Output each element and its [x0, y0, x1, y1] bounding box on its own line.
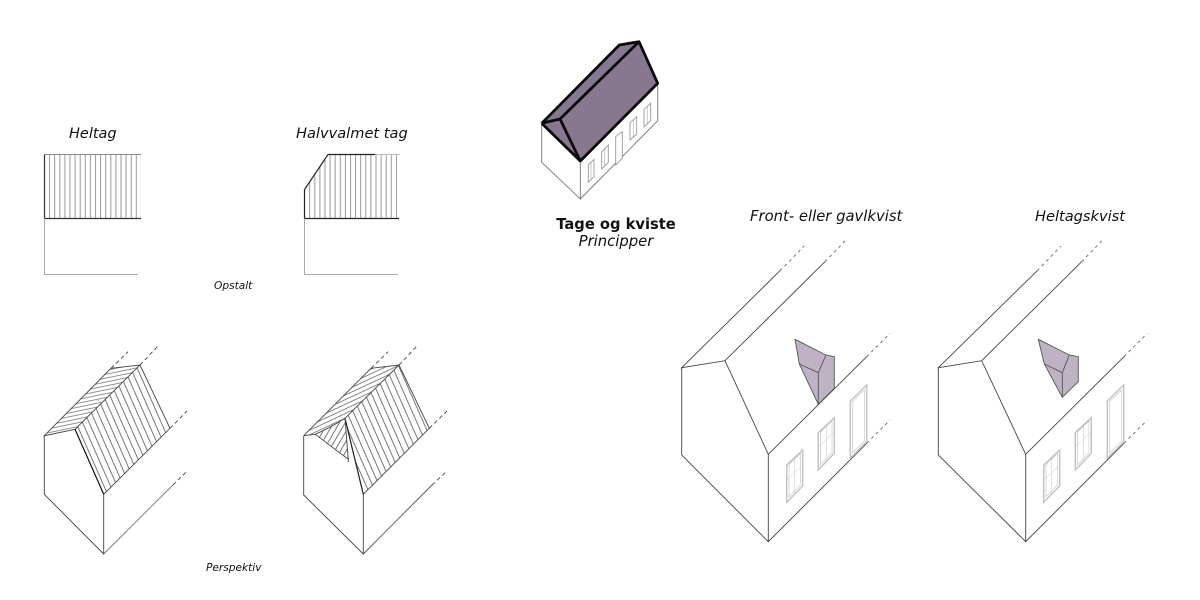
windows and door — [787, 385, 867, 502]
heading: Heltagskvist: Heltagskvist — [1035, 208, 1126, 225]
heading: Front- eller gavlkvist: Front- eller gavlkvist — [750, 208, 904, 225]
roof — [542, 42, 658, 161]
subtitle: Principper: Principper — [579, 233, 654, 250]
elevation drawing: Heltag — [44, 154, 141, 274]
perspective drawing: Heltag — [44, 346, 187, 554]
icon: front dormer — [795, 339, 834, 404]
windows and door — [588, 103, 651, 182]
walls — [542, 83, 658, 199]
label: Perspektiv: Perspektiv — [206, 562, 262, 574]
dormer house: Heltagskvist — [938, 241, 1147, 542]
perspective drawing: Halvvalmet tag — [304, 346, 447, 554]
icon: roof dormer — [1038, 339, 1078, 397]
heading: Halvvalmet tag: Halvvalmet tag — [296, 125, 408, 142]
label: Opstalt: Opstalt — [214, 280, 253, 292]
heading: Heltag: Heltag — [69, 126, 117, 142]
main house illustration — [542, 42, 658, 199]
title: Tage og kviste: Tage og kviste — [556, 216, 676, 233]
dormer house: Front- eller gavlkvist — [682, 241, 890, 542]
elevation drawing: Halvvalmet tag — [304, 154, 400, 274]
windows and door — [1044, 385, 1124, 502]
